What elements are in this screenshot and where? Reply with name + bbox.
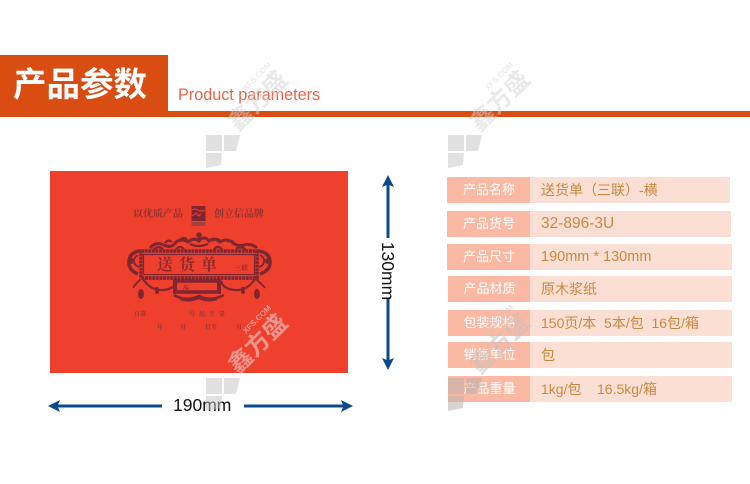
watermark top left: 鑫方盛 xyxy=(222,66,293,136)
heading text: 产品参数 xyxy=(13,67,147,104)
row: packaging: 包装规格 xyxy=(463,315,516,330)
row: material: 原木浆纸 xyxy=(541,281,597,297)
width arrow right xyxy=(244,400,353,412)
cover slogan left: 以优质产品 xyxy=(133,205,183,220)
row: sales unit: 销售单位 xyxy=(463,347,516,362)
width arrow left xyxy=(48,400,162,412)
form subtitle: 三联 xyxy=(235,263,248,272)
height arrow top xyxy=(382,175,394,238)
row: weight: 产品重量 xyxy=(463,381,516,396)
cover slogan right: 创立信品牌 xyxy=(214,205,264,220)
brand logo xyxy=(192,206,206,226)
row: item number xyxy=(447,211,731,237)
number mark: № xyxy=(182,284,190,292)
height arrow bottom xyxy=(382,298,394,370)
watermark top left: XFS.COM xyxy=(241,60,273,92)
row: size xyxy=(447,244,732,270)
row: packaging xyxy=(448,310,732,336)
watermark bottom left: 鑫方盛 xyxy=(222,309,293,379)
row: weight: 1kg/包 16.5kg/箱 xyxy=(541,381,657,397)
ornamental title frame xyxy=(129,234,270,300)
heading block xyxy=(0,55,168,117)
row: item number: 32-896-3U xyxy=(541,215,614,232)
spec table xyxy=(447,177,732,402)
watermark top right: 鑫方盛 xyxy=(464,66,535,136)
row: name xyxy=(447,177,730,203)
row: packaging: 150页/本 5本/包 16包/箱 xyxy=(541,315,699,331)
row: sales unit xyxy=(448,342,732,368)
watermark bottom left: XFS.COM xyxy=(241,303,273,335)
form title: 送货单 xyxy=(157,252,217,275)
row: size: 190mm * 130mm xyxy=(541,249,651,265)
watermark bottom left xyxy=(206,303,293,411)
row: name: 送货单（三联）-横 xyxy=(541,182,658,198)
serial line end: 号 xyxy=(259,309,265,318)
watermark bottom right: 鑫方盛 xyxy=(464,309,535,379)
serial line: 自第 xyxy=(134,309,146,318)
date line month: 月 xyxy=(180,322,186,331)
date line end: 月 xyxy=(236,322,242,331)
row: name: 产品名称 xyxy=(463,182,515,197)
watermark top left xyxy=(206,60,293,168)
height label: 130mm xyxy=(378,242,398,300)
watermark top right xyxy=(448,60,535,168)
serial line middle: 号起至第 xyxy=(189,309,225,318)
row: weight xyxy=(448,376,732,402)
row: size: 产品尺寸 xyxy=(463,249,515,264)
date line day: 日至 xyxy=(205,322,217,331)
width label: 190mm xyxy=(173,395,231,415)
watermark top right: XFS.COM xyxy=(483,60,515,92)
header bar xyxy=(0,111,750,117)
ornament drops xyxy=(128,232,271,299)
watermark bottom right xyxy=(448,303,535,411)
row: sales unit: 包 xyxy=(541,347,555,363)
row: material xyxy=(448,276,732,302)
date line: 年 xyxy=(157,322,163,331)
subheading: Product parameters xyxy=(178,86,320,104)
row: item number: 产品货号 xyxy=(463,216,515,231)
product image: red delivery note cover xyxy=(50,171,348,373)
watermark bottom right: XFS.COM xyxy=(483,303,515,335)
row: material: 产品材质 xyxy=(463,281,516,296)
